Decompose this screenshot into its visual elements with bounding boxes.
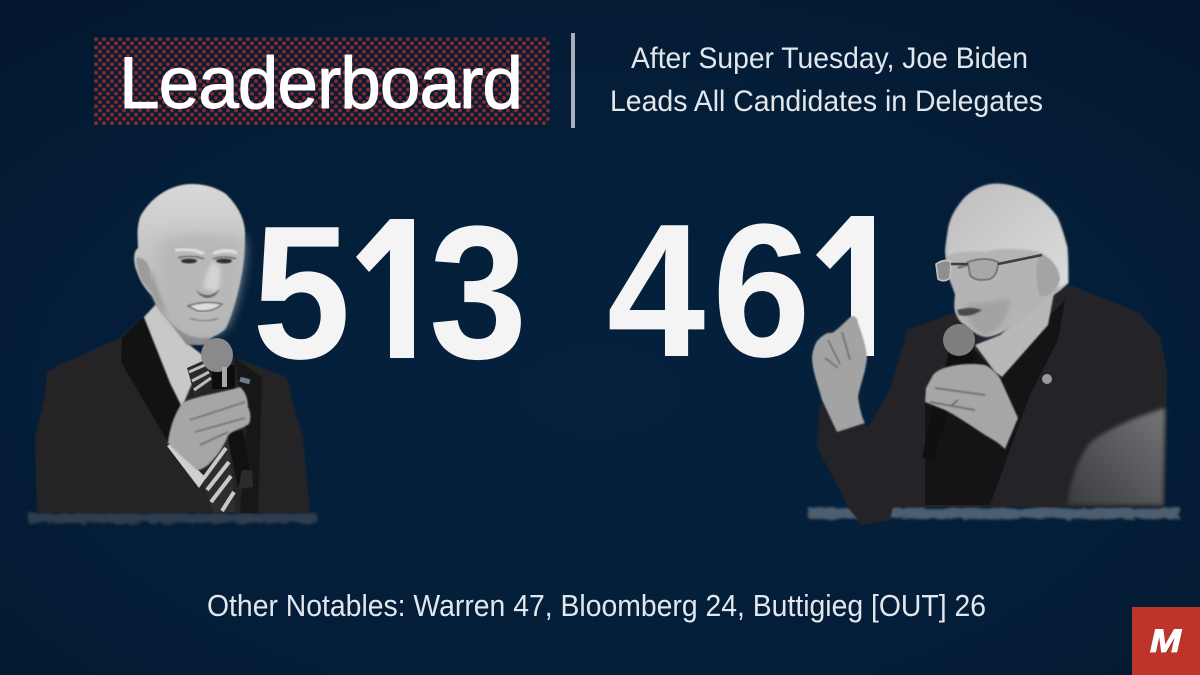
- other notables: Other Notables: Warren 47, Bloomberg 24, Buttigieg [OUT] 26: [207, 588, 986, 623]
- logo: M: [1151, 624, 1183, 660]
- cuff: [167, 443, 206, 488]
- logo: [1132, 607, 1200, 675]
- microphone: [201, 338, 253, 489]
- header divider: [571, 33, 575, 128]
- photo: Sanders portrait: [808, 184, 1180, 525]
- ground brush stroke: [28, 513, 318, 523]
- subtitle: Leads All Candidates in Delegates: [610, 85, 1043, 118]
- hand on microphone: [925, 364, 1018, 449]
- microphone: [922, 324, 975, 460]
- Sanders delegate count: [610, 216, 874, 358]
- Biden delegate count: 513: [252, 186, 527, 398]
- lapel pin: [239, 377, 250, 384]
- face details: [936, 254, 1060, 336]
- shirt collar: [975, 288, 1055, 377]
- face details: [136, 234, 243, 334]
- neck: [150, 285, 225, 345]
- raised hand: [812, 316, 867, 432]
- subtitle: After Super Tuesday, Joe Biden: [631, 42, 1028, 75]
- head: [945, 184, 1068, 337]
- tie: [187, 360, 236, 512]
- hand: [168, 387, 250, 470]
- Biden delegate count: [258, 219, 521, 360]
- ground brush stroke: [808, 508, 1180, 519]
- lapel pin: [1042, 374, 1052, 384]
- subtitle: [610, 42, 1043, 118]
- title: Leaderboard on halftone box: Leaderboard: [119, 43, 523, 124]
- sweater: [925, 300, 1065, 505]
- logo: M: [1150, 623, 1183, 659]
- photo: Biden portrait: [28, 184, 318, 523]
- shirt: [144, 303, 205, 407]
- jacket: [35, 317, 310, 513]
- jacket: [817, 285, 1167, 525]
- Sanders delegate count: 461: [607, 184, 899, 396]
- foreground blurred head: [1067, 408, 1165, 505]
- hair: [947, 184, 1068, 288]
- head: [134, 184, 245, 338]
